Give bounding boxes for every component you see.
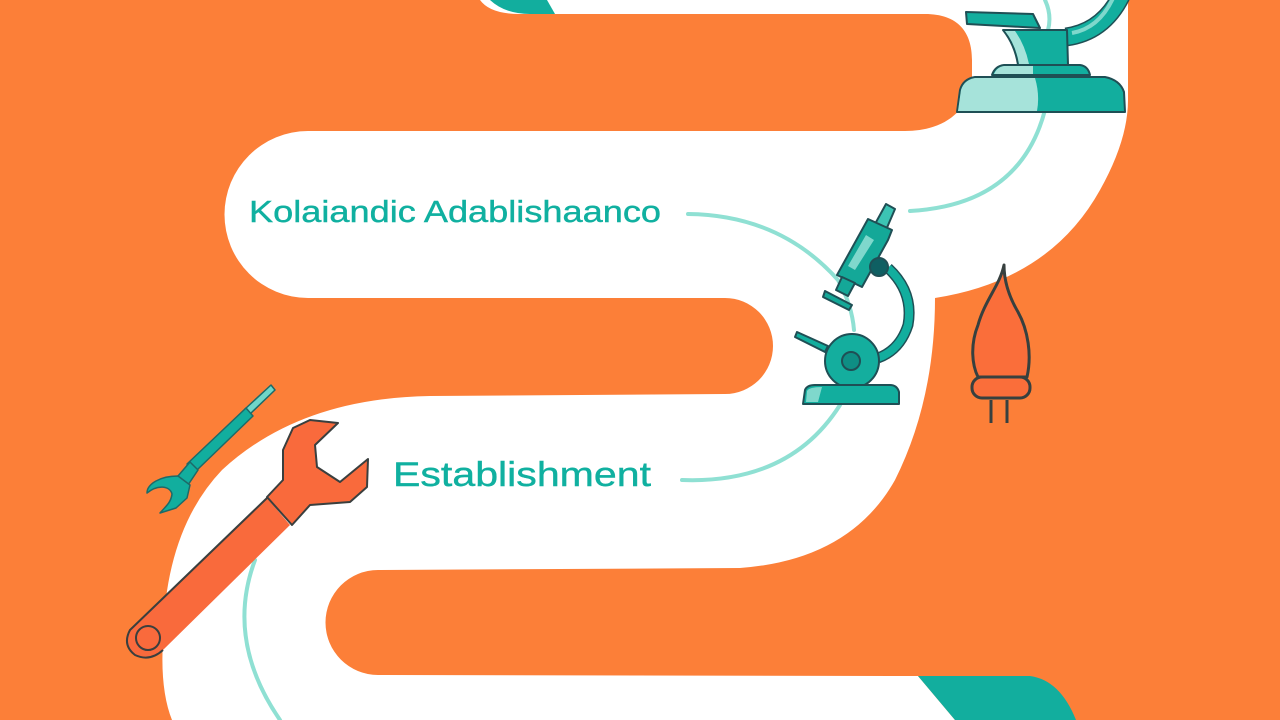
heading: upper label: Kolaiandic Adablishaanco: [249, 194, 661, 229]
teal corner bottom: [918, 676, 1076, 720]
connector lines: [244, 0, 1049, 720]
winding white road: [162, 0, 1128, 720]
teal corner top: [490, 0, 555, 14]
icon: microscope: [795, 204, 909, 404]
icon: small wrench: [147, 385, 275, 513]
icon: microscope base top right: [957, 0, 1125, 112]
icon: flame: [972, 265, 1030, 423]
heading: lower label: Establishment: [393, 456, 652, 494]
icon: large wrench: [127, 420, 368, 658]
